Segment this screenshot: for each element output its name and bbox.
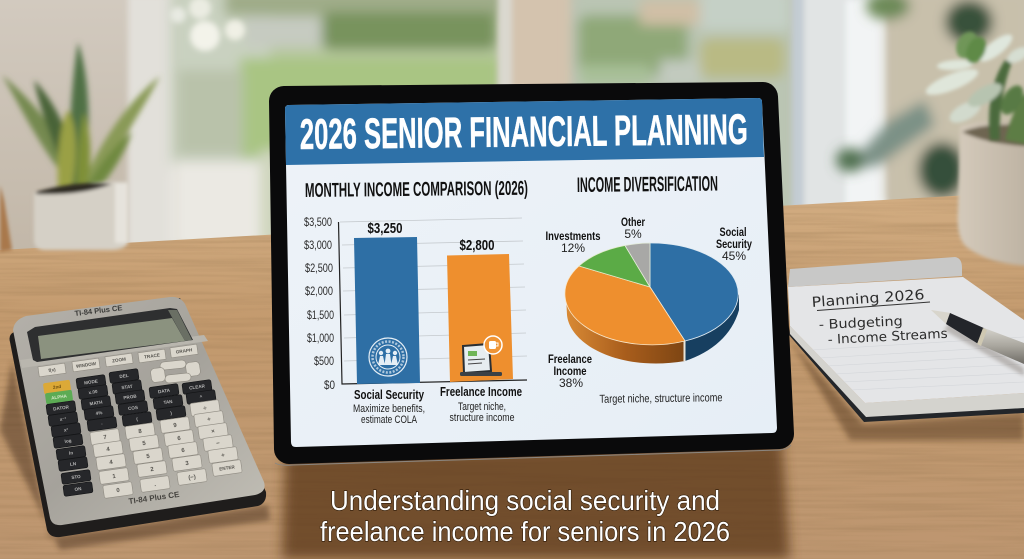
calculator keys: DATOR (53, 404, 70, 412)
calculator keys: . (154, 482, 157, 488)
calculator keys: x.00 (88, 389, 98, 395)
icon: social security seal (369, 338, 407, 376)
bar captions: estimate COLA (361, 414, 417, 426)
calculator keys: ( (136, 416, 139, 422)
y axis labels: $3,000 (304, 240, 332, 252)
bar captions: Target niche, (458, 401, 506, 413)
calculator keys: 6 (177, 436, 182, 442)
calculator keys: x⁻¹ (59, 416, 67, 422)
desk surface (0, 190, 1024, 559)
caption (320, 485, 730, 547)
caption: freelance income for seniors in 2026 (320, 516, 730, 547)
calculator keys: + (207, 417, 212, 423)
pie labels: Security (716, 237, 752, 251)
bar captions: Social Security (354, 387, 425, 402)
calculator keys: × (211, 429, 216, 435)
calculator keys: 0 (116, 488, 121, 494)
tablet screen (285, 98, 777, 447)
calculator keys: + (221, 453, 226, 459)
right potted plant (923, 28, 1024, 266)
panel: monthly income bar chart (304, 178, 528, 426)
calculator keys: WINDOW (76, 361, 97, 369)
calculator keys: ZOOM (112, 357, 126, 363)
left potted plant (0, 42, 160, 252)
calculator keys: DEL (119, 373, 129, 379)
heading: income diversification: INCOME DIVERSIFICATION (577, 173, 718, 197)
pen (931, 310, 1024, 376)
y axis labels: $500 (314, 356, 334, 368)
calculator brand labels (74, 303, 181, 506)
calculator keys: 1 (112, 474, 117, 480)
pie labels: Investments (546, 229, 601, 243)
calculator keys: f(x) (48, 367, 56, 373)
calculator keys: ) (170, 410, 173, 416)
calculator keys: ÷ (203, 406, 208, 412)
calculator keys: 2 (150, 467, 155, 473)
pie labels (546, 215, 752, 390)
header banner (285, 98, 764, 165)
panel: income diversification pie chart (546, 173, 752, 406)
calculator keys: ENTER (219, 464, 236, 472)
calculator keys: 5 (146, 454, 151, 460)
calculator keys: 4% (95, 410, 103, 416)
calculator keys: 5 (142, 441, 147, 447)
y axis labels: $0 (324, 380, 335, 392)
calculator keys: COS (128, 405, 138, 411)
calculator keys: LN (70, 461, 77, 467)
calculator keys: 8 (138, 429, 143, 435)
heading: monthly income comparison: MONTHLY INCOME COMPARISON (2026) (305, 178, 528, 202)
calculator keys: CLEAR (189, 383, 206, 391)
y axis labels: $1,000 (307, 333, 334, 345)
pie labels: Social (720, 225, 746, 239)
bar: freelance income (447, 237, 513, 382)
calculator keys: ON (74, 486, 82, 492)
calculator keys: STAT (121, 384, 133, 390)
pie labels: Freelance (548, 352, 592, 366)
calculator keys: log (64, 438, 72, 444)
calculator keys: STO (71, 474, 81, 480)
blurred window background (0, 0, 1024, 260)
bar captions (353, 384, 522, 426)
calculator keys: 9 (173, 423, 178, 429)
y axis labels (304, 217, 335, 392)
bar: social security (354, 220, 420, 384)
calculator keys: x² (64, 427, 69, 433)
handwritten note: - Budgeting (819, 314, 903, 333)
calculator keys: − (216, 441, 221, 447)
icon: laptop with coffee (460, 336, 502, 376)
calculator keys: MODE (84, 379, 98, 385)
calculator keys: MATH (89, 400, 103, 406)
calculator keys: TRACE (144, 352, 160, 360)
bar captions: Freelance Income (440, 384, 522, 399)
calculator keys: · (101, 421, 103, 427)
pie labels: 45% (722, 249, 746, 263)
handwritten note (811, 287, 948, 348)
bar captions: structure income (450, 412, 514, 424)
pie labels: 12% (561, 241, 585, 255)
y axis labels: $2,500 (305, 263, 333, 275)
pie labels: 38% (559, 376, 583, 390)
pie labels: Income (554, 364, 587, 378)
calculator display (27, 308, 193, 362)
tablet (275, 97, 791, 465)
y axis labels: $3,500 (304, 217, 332, 229)
calculator keys: DATA (158, 388, 171, 394)
calculator keys: PROB (123, 394, 138, 400)
caption: Understanding social security and (330, 485, 720, 516)
handwritten note: - Income Streams (827, 327, 948, 348)
bar captions: Maximize benefits, (353, 403, 425, 415)
pie caption: Target niche, structure income (599, 392, 723, 406)
3D pie chart (565, 243, 739, 364)
calculator keys: ln (69, 450, 74, 456)
calculator keys: 6 (181, 448, 186, 454)
calculator keys (38, 344, 242, 498)
bar: freelance income: $2,800 (460, 237, 494, 254)
calculator keys: TAN (163, 399, 174, 405)
handwritten note: Planning 2026 (811, 287, 925, 311)
calculator keys: 2nd (53, 384, 62, 390)
tablet bezel (284, 97, 779, 449)
notepad (788, 257, 1024, 440)
bar: social security: $3,250 (368, 220, 402, 237)
calculator (0, 297, 270, 550)
calculator keys: 4 (109, 460, 114, 466)
calculator keys: GRAPH (175, 347, 193, 355)
calculator keys: 3 (185, 461, 190, 467)
calculator brand labels: TI-84 Plus CE (74, 303, 123, 318)
y axis labels: $2,000 (305, 286, 333, 298)
calculator keys: 7 (103, 435, 108, 441)
calculator brand labels: TI-84 Plus CE (128, 490, 181, 506)
calculator keys: 4 (106, 447, 111, 453)
calculator keys: ALPHA (51, 393, 68, 401)
y axis labels: $1,500 (307, 310, 334, 322)
calculator keys: (−) (188, 474, 196, 481)
calculator keys: ^ (199, 394, 203, 400)
pie labels: Other (621, 215, 645, 229)
pie labels: 5% (624, 227, 642, 241)
